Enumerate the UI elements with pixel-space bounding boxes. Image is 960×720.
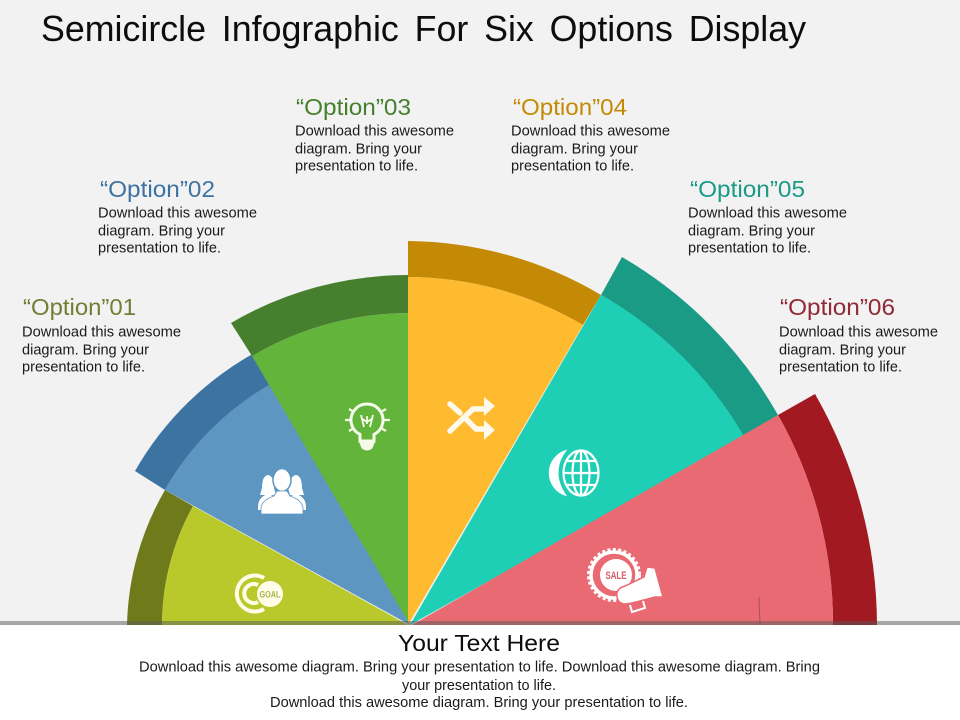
text block: option 03: Download this awesome — [295, 122, 454, 140]
title: Semicircle Infographic For Six Options Display — [41, 8, 807, 49]
panel: option 06 text — [779, 294, 938, 376]
text block: option 04: Download this awesome — [511, 122, 670, 140]
text block: option 04 — [511, 122, 670, 174]
panel: option 03 text — [295, 94, 454, 174]
icon: light bulb — [345, 404, 390, 450]
panel: option 02 text — [98, 176, 257, 256]
segment 01 — [127, 490, 408, 625]
text block: option 01: presentation to life. — [22, 358, 145, 376]
segment 04 — [408, 241, 601, 625]
panel: option 04 text — [511, 94, 670, 174]
panel: footer text — [139, 630, 820, 711]
heading: your text here: Your Text Here — [398, 630, 560, 656]
text block: option 01: Download this awesome — [22, 324, 181, 340]
panel: option 01 text — [22, 294, 181, 376]
text block: option 03: diagram. Bring your — [295, 140, 422, 158]
heading: option 04: “Option”04 — [513, 94, 627, 120]
text block: option 02: Download this awesome — [98, 204, 257, 222]
icon: sale megaphone — [588, 550, 663, 612]
text block: option 02: diagram. Bring your — [98, 222, 225, 240]
text block: option 05 — [688, 204, 847, 256]
heading: option 01: “Option”01 — [23, 294, 136, 320]
text block: option 02: presentation to life. — [98, 240, 221, 256]
heading: option 05: “Option”05 — [690, 176, 805, 202]
text block: footer body: Download this awesome diagram. Bring your presentation to life. — [270, 694, 688, 711]
text block: footer body — [139, 658, 820, 711]
icon: people — [258, 468, 306, 514]
text block: option 04: presentation to life. — [511, 158, 634, 174]
text block: option 03: presentation to life. — [295, 158, 418, 174]
text block: option 06: diagram. Bring your — [779, 342, 906, 358]
segment 03 — [231, 275, 410, 625]
heading: option 06: “Option”06 — [780, 294, 895, 320]
segment 05 — [410, 257, 778, 625]
segment 02 — [135, 351, 410, 625]
segment 06 — [412, 394, 877, 625]
panel: option 05 text — [688, 176, 847, 256]
text block: footer body: your presentation to life. — [402, 677, 556, 694]
icon: sale megaphone: SALE — [606, 570, 626, 582]
heading: option 03: “Option”03 — [296, 94, 411, 120]
text block: option 01 — [22, 324, 181, 376]
text block: option 05: diagram. Bring your — [688, 222, 815, 240]
text block: option 05: presentation to life. — [688, 240, 811, 256]
heading: option 02: “Option”02 — [100, 176, 215, 202]
icon: goal — [237, 576, 283, 611]
divider band — [0, 621, 960, 625]
text block: option 02 — [98, 204, 257, 256]
icon: goal: GOAL — [260, 590, 281, 600]
text block: option 06 — [779, 324, 938, 376]
text block: option 01: diagram. Bring your — [22, 342, 149, 358]
icon: globe — [549, 450, 598, 496]
text block: option 03 — [295, 122, 454, 174]
text block: footer body: Download this awesome diagram. Bring your presentation to life. Download this awesome diagram. Bring — [139, 658, 820, 676]
text block: option 06: Download this awesome — [779, 324, 938, 340]
text block: option 04: diagram. Bring your — [511, 140, 638, 158]
text block: option 06: presentation to life. — [779, 358, 902, 376]
icon: shuffle arrows — [450, 397, 495, 440]
chart: semicircle of six segments — [127, 241, 877, 625]
text block: option 05: Download this awesome — [688, 204, 847, 222]
